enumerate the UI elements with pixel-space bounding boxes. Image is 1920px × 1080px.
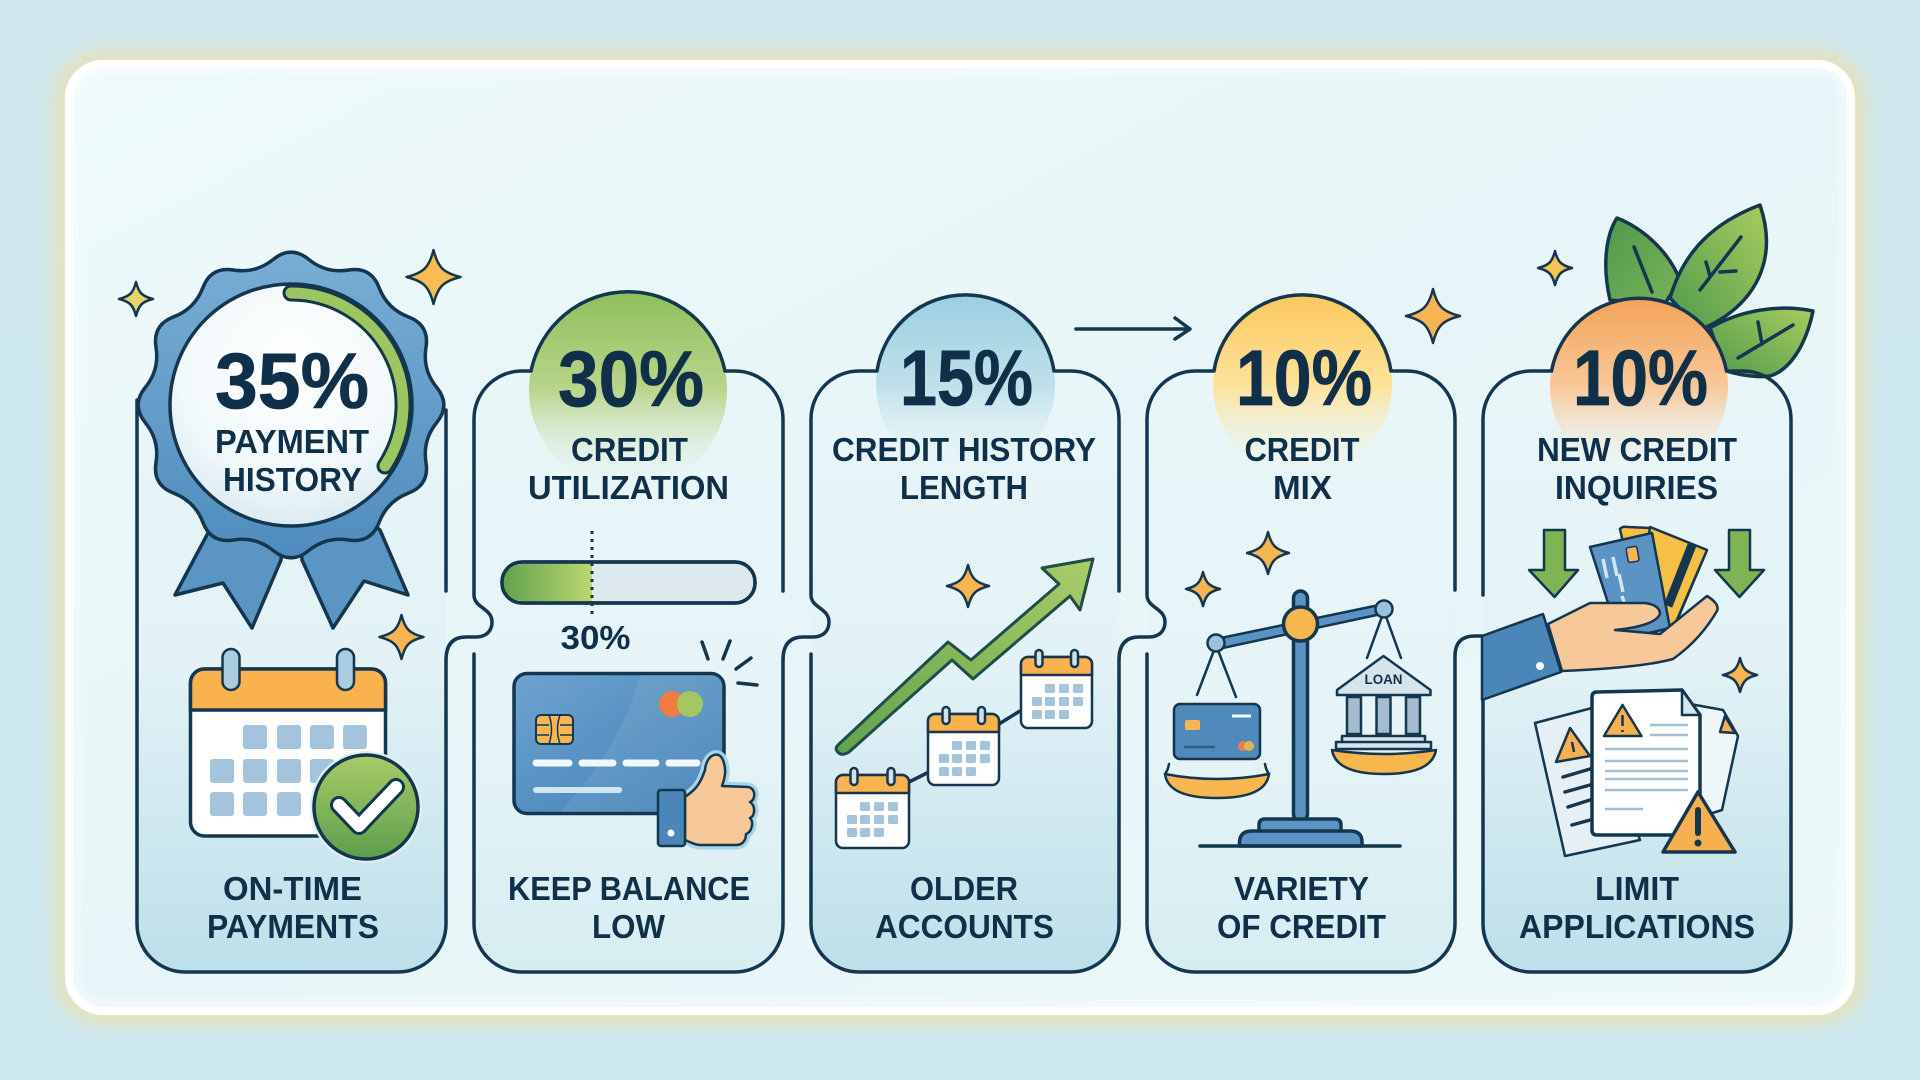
caption: variety of credit: OF CREDIT: [1217, 908, 1386, 945]
icon: calendar 3: [1021, 650, 1092, 728]
caption: keep balance low: LOW: [592, 908, 666, 945]
panel 2: credit utilization: [446, 291, 783, 972]
panel 1 background: [137, 371, 446, 972]
panel 4 background: [1147, 371, 1455, 972]
10 percent: 10%: [1236, 333, 1372, 422]
35 percent: 35%: [215, 336, 369, 425]
caption: older accounts: ACCOUNTS: [875, 908, 1054, 945]
heading: credit mix: [1244, 431, 1360, 506]
icon: credit card with thumbs up: [514, 641, 757, 846]
heading: credit history length: [832, 431, 1096, 506]
panel 3 background: [811, 371, 1119, 972]
sparkle: [1538, 251, 1572, 285]
caption: limit applications: APPLICATIONS: [1519, 908, 1755, 945]
sparkle: [1186, 572, 1220, 606]
icon: calendar 2: [928, 707, 999, 785]
panel 5 heading circle: [1550, 298, 1728, 476]
heading: credit utilization: [528, 431, 729, 506]
sparkle: [1406, 289, 1460, 343]
sparkle: [380, 615, 424, 659]
icon: down arrow right: [1715, 530, 1764, 597]
panel 4 outline with connector: [1119, 295, 1484, 972]
panel 5 heading circle base: [1550, 298, 1728, 476]
panel 2 background: [474, 371, 783, 972]
heading: payment history: PAYMENT: [215, 423, 369, 460]
arrow between panels 3 and 4: [1076, 318, 1190, 339]
heading: payment history: [215, 423, 369, 498]
30 percent: 30%: [558, 334, 704, 423]
heading: credit history length: CREDIT HISTORY: [832, 431, 1096, 468]
heading: payment history: HISTORY: [223, 461, 362, 498]
sparkle: [1247, 532, 1289, 574]
caption: variety of credit: VARIETY: [1234, 870, 1369, 907]
heading: credit utilization: UTILIZATION: [528, 469, 729, 506]
caption: older accounts: [875, 870, 1054, 945]
caption: variety of credit: [1217, 870, 1386, 945]
caption: limit applications: LIMIT: [1595, 870, 1679, 907]
heading: credit mix: MIX: [1273, 469, 1332, 506]
rosette badge: [138, 252, 444, 558]
caption: limit applications: [1519, 870, 1755, 945]
heading: credit utilization: CREDIT: [571, 431, 688, 468]
sparkle: [119, 282, 153, 316]
caption: on-time payments: [207, 870, 379, 945]
icon: balance scale: [1165, 591, 1436, 846]
icon: hand holding cards: [1482, 527, 1718, 700]
heading: credit history length: LENGTH: [900, 469, 1028, 506]
15 percent: 15%: [900, 333, 1033, 422]
sparkle: [406, 250, 460, 304]
icon: calendar with check: [190, 649, 422, 863]
heading: credit mix: CREDIT: [1244, 431, 1360, 468]
icon: leaves: [1606, 205, 1813, 377]
heading: new credit inquiries: [1537, 431, 1737, 506]
caption: keep balance low: KEEP BALANCE: [508, 870, 750, 907]
panel 1: payment history: [119, 250, 460, 972]
icon: down arrow left: [1529, 530, 1578, 597]
sparkle: [1723, 658, 1757, 692]
panel 2 heading circle: [529, 291, 727, 489]
caption: older accounts: OLDER: [910, 870, 1018, 907]
panel 3 outline with connector: [783, 295, 1119, 972]
utilization bar: [502, 531, 755, 615]
10 percent: 10%: [1573, 333, 1708, 422]
loan label: LOAN: [1364, 671, 1402, 687]
panel 4: credit mix: [1119, 289, 1484, 972]
caption: on-time payments: ON-TIME: [223, 870, 362, 907]
panel 2 outline with connector: [446, 292, 783, 972]
icon: calendar 1: [836, 768, 909, 848]
panel 3: credit history length: [783, 295, 1119, 972]
ribbon tails: [175, 510, 408, 628]
icon: rising arrow: [836, 559, 1093, 754]
panel 5 background: [1483, 371, 1791, 972]
heading: new credit inquiries: INQUIRIES: [1555, 469, 1718, 506]
caption: keep balance low: [508, 870, 750, 945]
panel 1 outline: [137, 400, 446, 972]
bar label 30%: 30%: [560, 619, 630, 656]
panel 5 outline: [1483, 298, 1791, 972]
caption: on-time payments: PAYMENTS: [207, 908, 379, 945]
panel 5: new credit inquiries: [1482, 205, 1813, 972]
icon: documents with warnings: [1535, 690, 1738, 856]
sparkle: [947, 565, 989, 607]
heading: new credit inquiries: NEW CREDIT: [1537, 431, 1737, 468]
panel 4 heading circle: [1213, 296, 1392, 474]
calendar connector lines: [909, 711, 1020, 782]
panel 3 heading circle: [876, 296, 1055, 474]
